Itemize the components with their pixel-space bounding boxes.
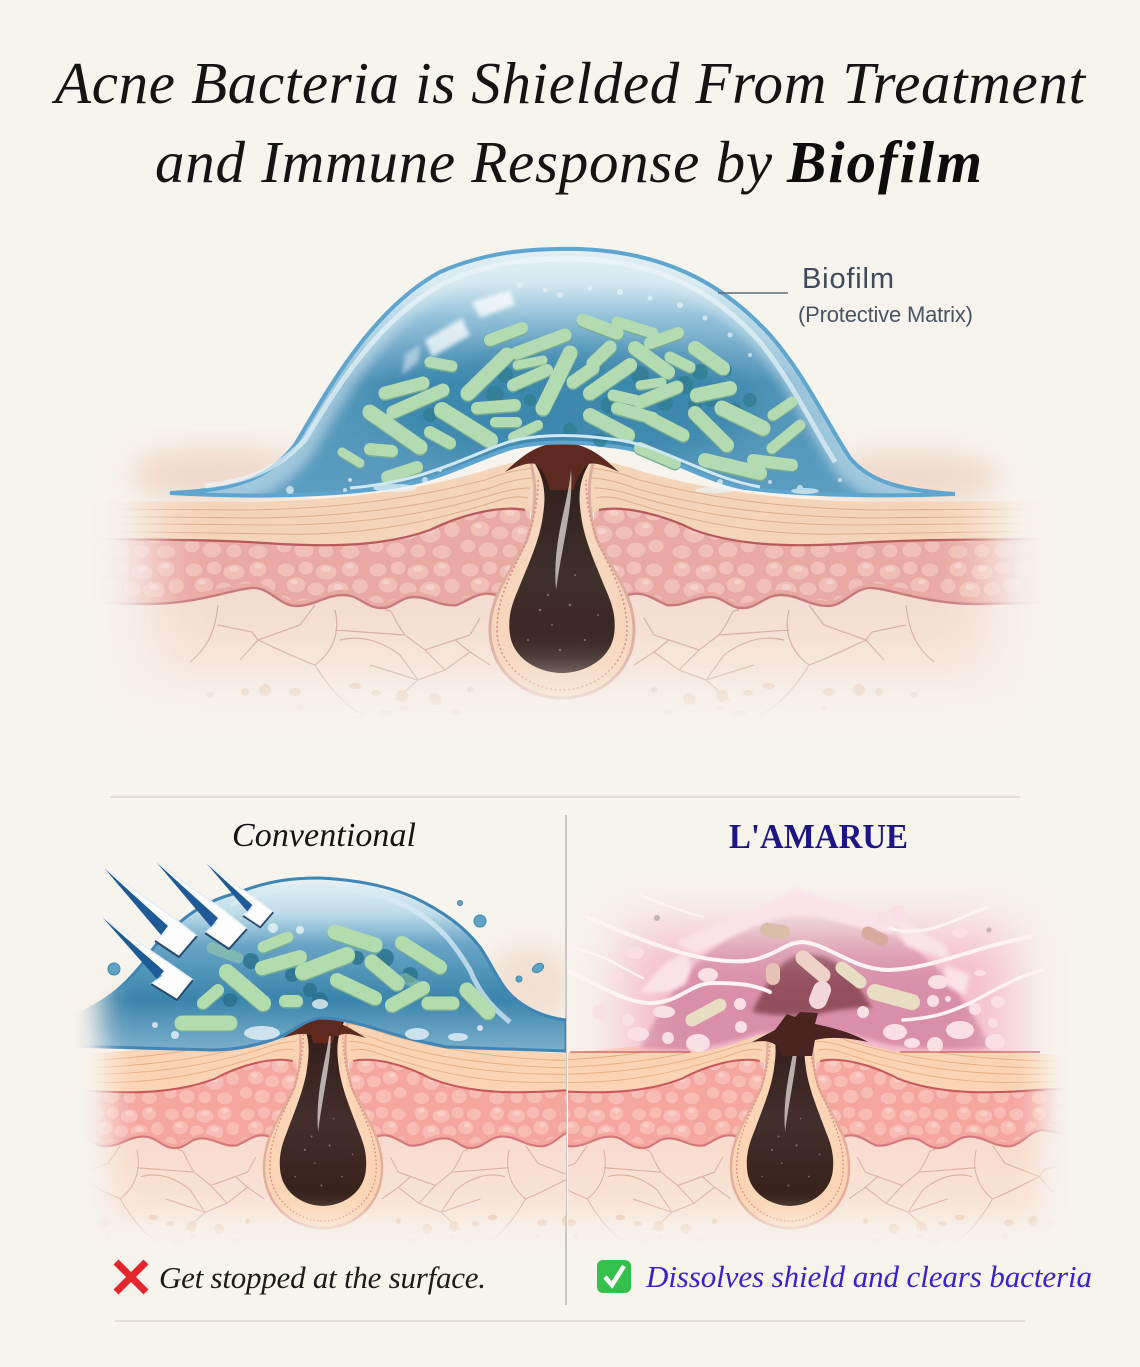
droplets <box>654 915 992 932</box>
frost speckles <box>286 282 842 494</box>
caption: conventional result: Get stopped at the surface. <box>159 1260 486 1295</box>
white flowing waves <box>570 895 1043 1020</box>
divider: above comparison <box>110 796 1020 798</box>
arrow 3 <box>207 864 273 927</box>
title: Biofilm <box>786 129 982 195</box>
frosted inner glow <box>203 287 924 494</box>
illustration: skin cross-section with follicle <box>110 444 1030 715</box>
dome bottom sheen <box>350 435 760 488</box>
crust fragments <box>640 888 970 995</box>
panel: L'AMARUE treatment <box>568 888 1062 1240</box>
arrows: treatment blocked at surface <box>103 863 273 1000</box>
jagged pore opening <box>752 1012 868 1056</box>
heading: conventional: Conventional <box>232 817 416 854</box>
dim bacteria and clusters <box>223 949 418 1008</box>
title <box>51 50 1087 195</box>
divider: bottom <box>115 1320 1025 1322</box>
skin with follicle <box>568 1034 1062 1240</box>
glass highlights <box>402 290 515 375</box>
faded bacteria <box>212 948 425 990</box>
bacteria rods <box>182 932 488 1024</box>
dark teal clusters <box>423 363 757 447</box>
skin with follicle <box>88 1020 566 1240</box>
frosted inner rim <box>205 259 835 486</box>
arrow 2 <box>157 863 247 949</box>
divider: between panels <box>565 815 567 1305</box>
title: Acne Bacteria is Shielded From Treatment <box>51 50 1087 116</box>
bacteria rods <box>342 320 800 478</box>
pore wedge <box>282 1020 366 1038</box>
heading: L'AMARUE brand: L'AMARUE <box>729 817 908 856</box>
biofilm dome <box>70 878 566 1051</box>
arrow 4 <box>103 918 193 1000</box>
icon: red cross <box>116 1262 146 1292</box>
leader line <box>718 292 788 294</box>
label: biofilm callout: (Protective Matrix) <box>798 302 973 327</box>
water droplets <box>108 900 545 982</box>
panel: conventional treatment <box>80 876 566 1240</box>
illustration: skin halo behind dome <box>130 447 1000 504</box>
caption: L'AMARUE result: Dissolves shield and clears bacteria <box>645 1259 1092 1294</box>
title: and Immune Response by <box>155 129 773 195</box>
icon: green check <box>597 1260 631 1293</box>
label: biofilm callout <box>718 263 973 327</box>
rubble <box>592 905 1005 1053</box>
arrow 1 <box>105 869 197 957</box>
label: biofilm callout: Biofilm <box>802 263 894 295</box>
frost flecks <box>152 923 483 1041</box>
surface line <box>570 1051 1040 1053</box>
illustration: biofilm dome <box>170 249 955 496</box>
pink dissolved biofilm <box>598 905 1037 1052</box>
skin peach halo <box>490 940 566 1018</box>
dissolved bacteria rods <box>692 930 912 1020</box>
